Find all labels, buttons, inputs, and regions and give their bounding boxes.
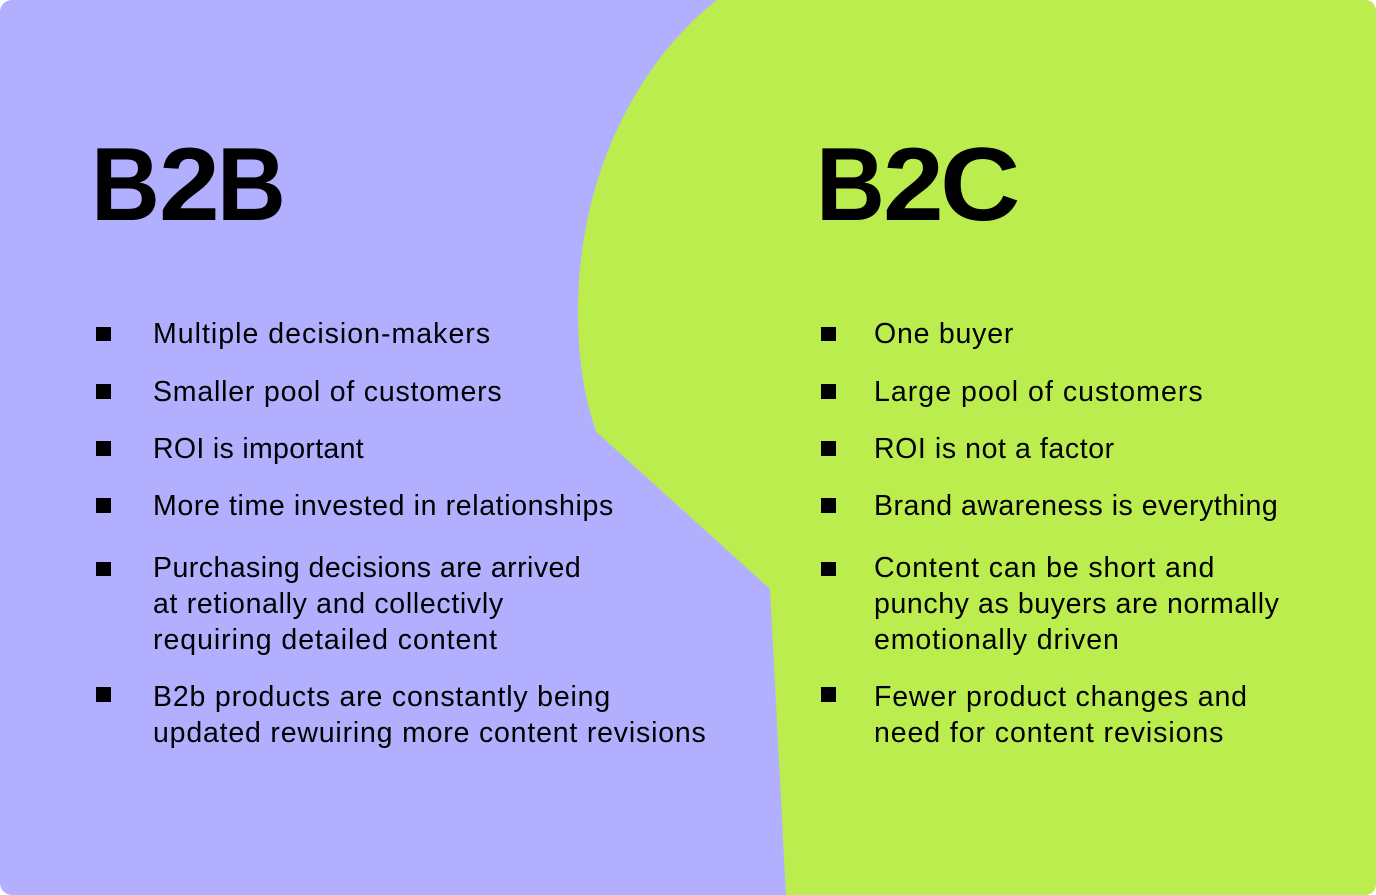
item: ROI not a factor: ROI is not a factor — [874, 433, 1115, 465]
item: short content: emotionally driven — [874, 624, 1120, 656]
item: purchasing decisions: requiring detailed content — [153, 624, 498, 656]
item: product updates — [96, 681, 707, 749]
item: short content: punchy as buyers are normally — [874, 588, 1280, 620]
heading: B2C: C — [940, 127, 1020, 243]
item: one buyer: One buyer — [874, 318, 1014, 350]
item: purchasing decisions — [96, 552, 581, 656]
heading: B2C: B — [816, 127, 885, 243]
item: purchasing decisions: at retionally and collectivly — [153, 588, 504, 620]
item: fewer changes: Fewer product changes and — [874, 681, 1248, 713]
heading: B2B: B — [91, 127, 160, 243]
item: ROI important: ROI is important — [153, 433, 364, 465]
list: B2C points — [821, 318, 1280, 749]
item: smaller pool: Smaller pool of customers — [153, 376, 502, 408]
item: fewer changes — [821, 681, 1248, 749]
item: brand awareness: Brand awareness is everything — [874, 490, 1278, 522]
item: time in relationships: More time invested in relationships — [153, 490, 614, 522]
item: short content: Content can be short and — [874, 552, 1215, 584]
item: multiple decision-makers: Multiple decision-makers — [153, 318, 491, 350]
item: product updates: B2b products are constantly being — [153, 681, 611, 713]
heading: B2B: B — [216, 127, 285, 243]
list: B2B points — [96, 318, 707, 749]
heading: B2C — [816, 127, 1020, 243]
item: short content — [821, 552, 1280, 656]
item: fewer changes: need for content revisions — [874, 717, 1224, 749]
heading: B2B: 2 — [159, 127, 220, 243]
heading: B2B — [91, 127, 285, 243]
item: large pool: Large pool of customers — [874, 376, 1204, 408]
heading: B2C: 2 — [883, 127, 944, 243]
item: product updates: updated rewuiring more content revisions — [153, 717, 707, 749]
item: purchasing decisions: Purchasing decisions are arrived — [153, 552, 581, 584]
